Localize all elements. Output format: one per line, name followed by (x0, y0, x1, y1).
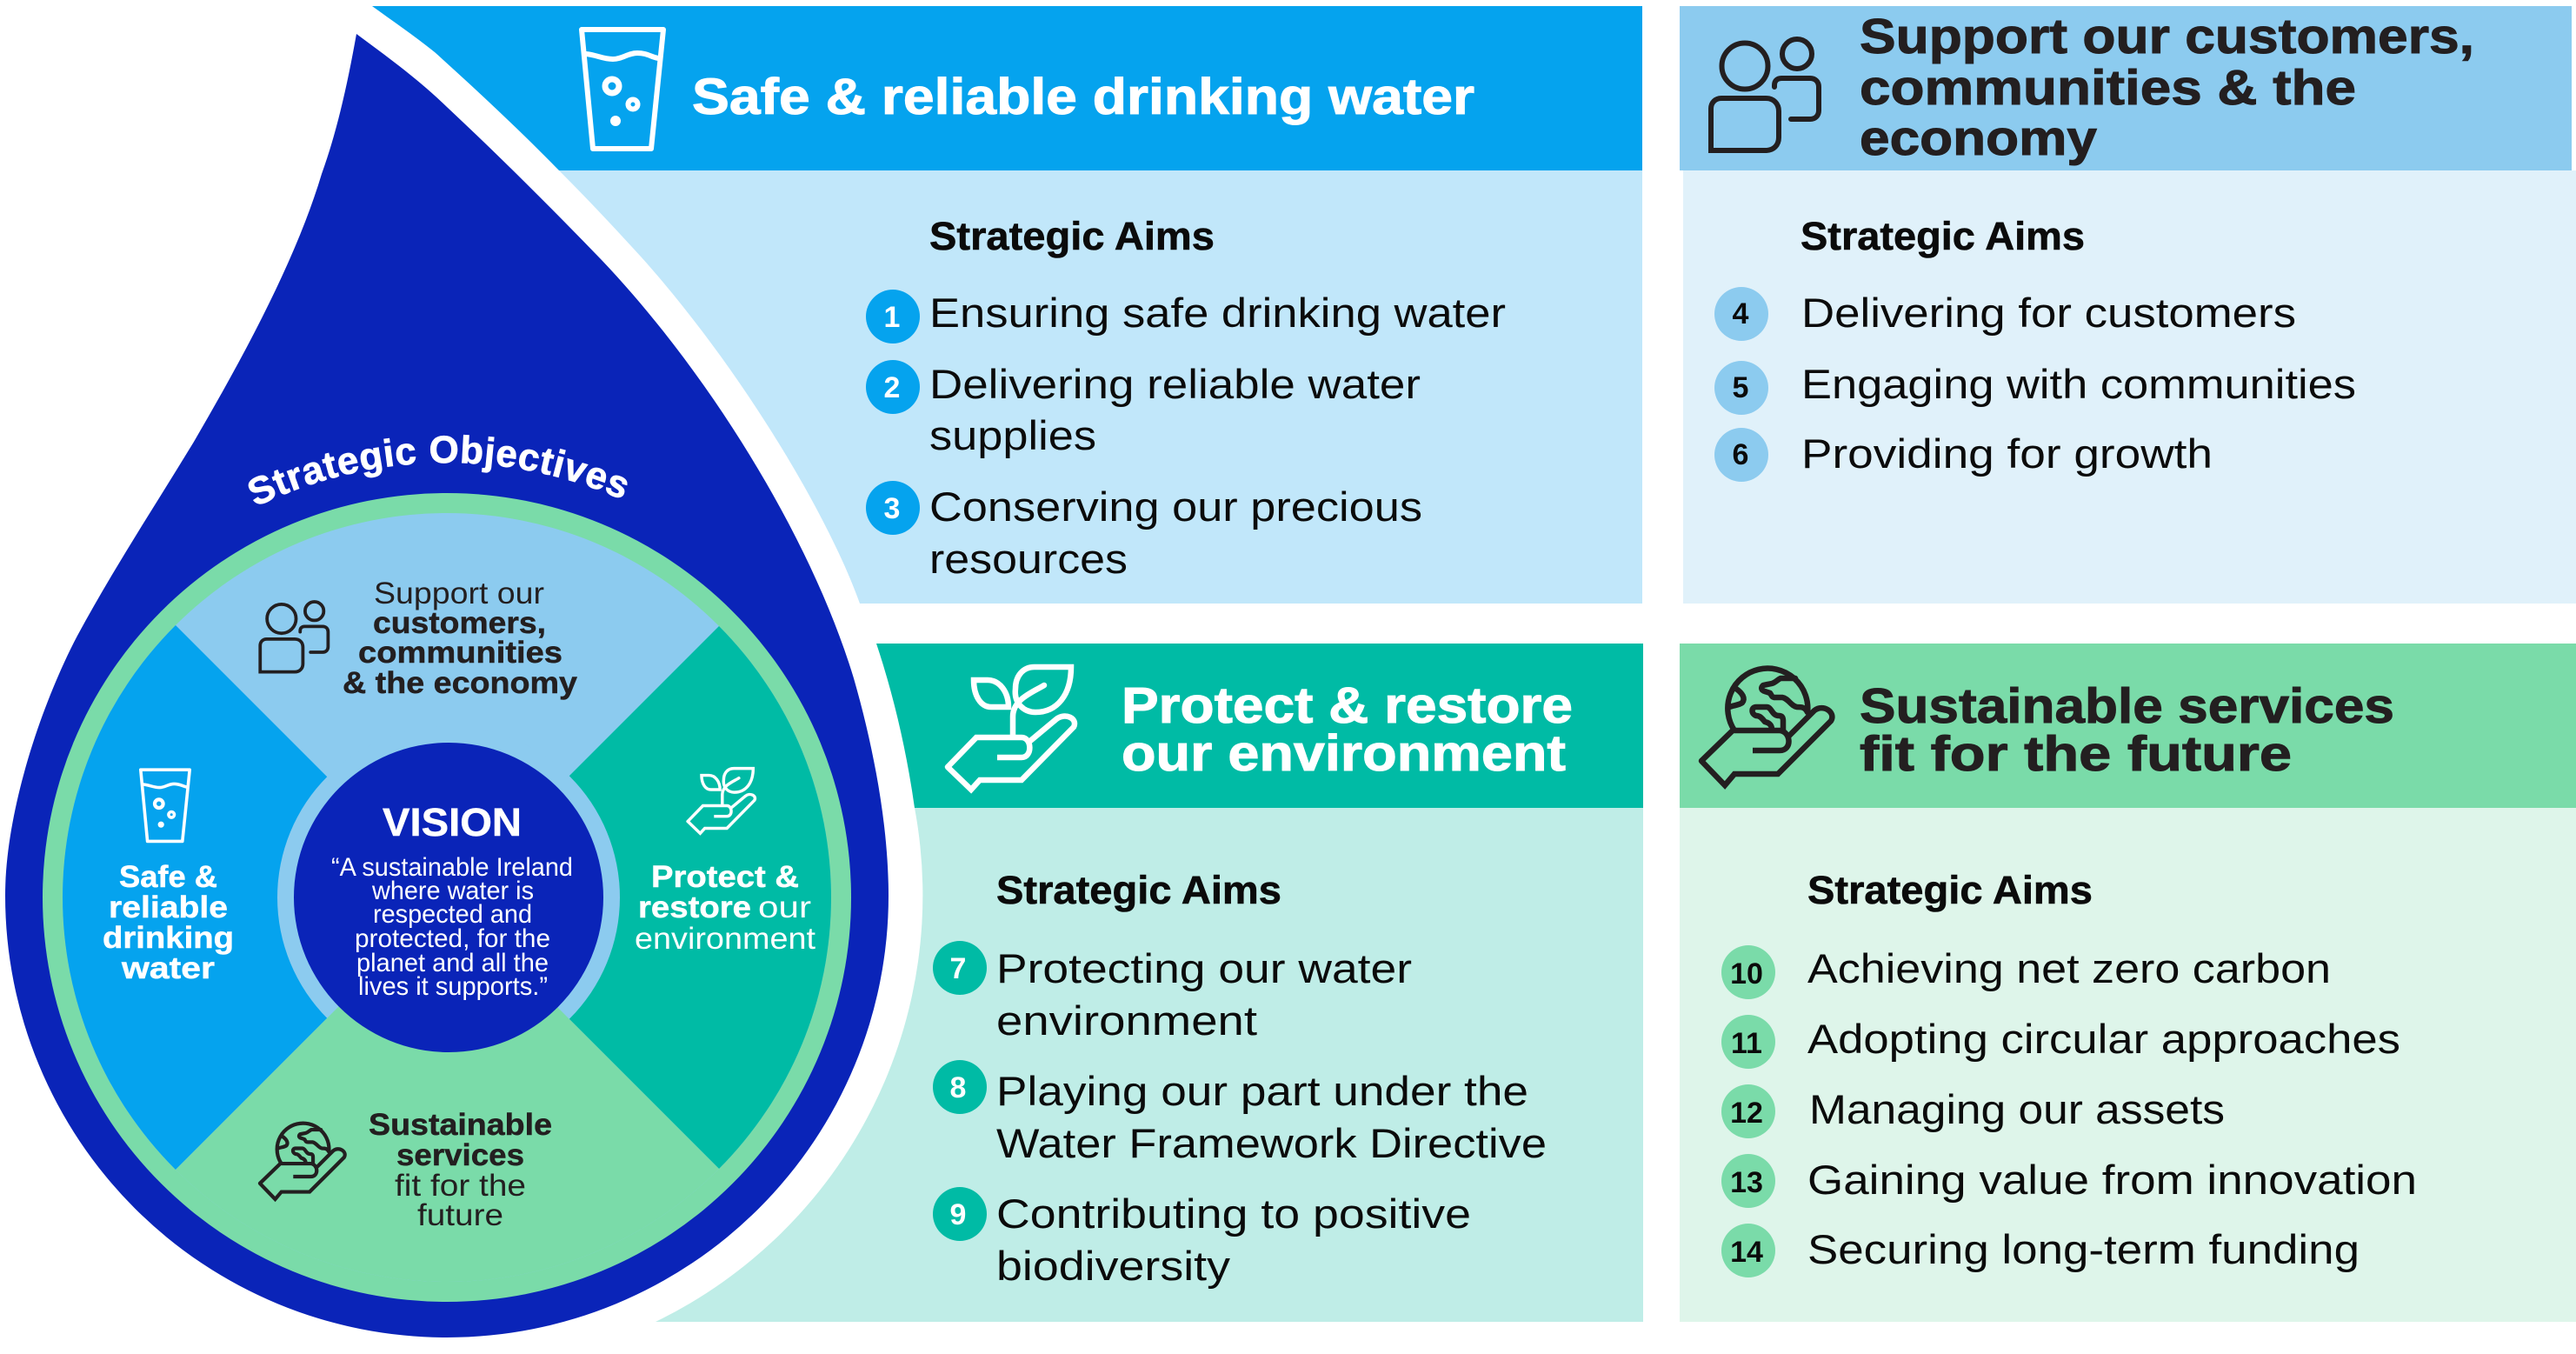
label: drinking water: water (121, 951, 215, 985)
label: environment (635, 860, 815, 956)
aim 4: Delivering for customers (1801, 290, 2296, 336)
panel body (1680, 808, 2576, 1322)
aim 8: 8 (950, 1071, 966, 1104)
outer ring (43, 493, 851, 1302)
heading: communities & the (1860, 60, 2356, 116)
aim 12: Managing our assets (1809, 1086, 2225, 1132)
heading: fit for the future (1860, 726, 2292, 782)
label: environment: our (758, 890, 811, 924)
vision quote: protected, for the (355, 924, 550, 953)
aim 9: 9 (950, 1198, 966, 1231)
aim 7: Protecting our water (996, 945, 1412, 991)
curved title: strategic objectives: Strategic Objectives (249, 435, 628, 504)
heading (1860, 9, 2474, 166)
label: customers: Support our (374, 577, 544, 610)
aim 6: Providing for growth (1801, 430, 2213, 477)
aim 5: Engaging with communities (1801, 361, 2356, 407)
heading: Sustainable services (1860, 678, 2394, 734)
vision quote: lives it supports.” (358, 972, 548, 1001)
sector: customers (63, 513, 831, 1282)
aim 14: Securing long-term funding (1807, 1226, 2360, 1272)
aim 4: 4 (1733, 297, 1749, 330)
panel body (656, 808, 1643, 1322)
aim 8: Water Framework Directive (996, 1120, 1547, 1166)
vision quote: “A sustainable Ireland (331, 853, 573, 882)
vision quote (331, 853, 573, 1001)
vision ring (277, 726, 620, 1069)
label: drinking water (103, 860, 234, 985)
panel header band (1680, 644, 2576, 808)
panel header band (876, 644, 1643, 808)
icon: glass of water (582, 30, 663, 149)
aim 11: Adopting circular approaches (1807, 1016, 2400, 1062)
panel: safe and reliable drinking water (372, 6, 1642, 604)
aim 11 (1721, 1015, 2400, 1069)
panel: sustainable services fit for the future (1680, 644, 2576, 1322)
label: customers: communities (358, 636, 562, 670)
label: environment: restore (638, 890, 751, 924)
icon: plant small (688, 769, 755, 833)
aim 7: environment (996, 997, 1257, 1044)
aim 6: 6 (1733, 438, 1748, 471)
icon: globe small (260, 1124, 345, 1199)
icon: plant in hand (948, 667, 1075, 790)
aim 9 (933, 1187, 1471, 1289)
water drop with strategic objectives (5, 34, 889, 1337)
aim 1 (866, 290, 1506, 344)
aim 2 (866, 360, 1421, 458)
aim 6 (1714, 428, 2213, 482)
aim 7: 7 (950, 952, 966, 985)
vision quote: planet and all the (356, 949, 549, 977)
panel body (559, 170, 1642, 604)
icon: people small (260, 602, 328, 672)
subheading: Strategic Aims (1801, 214, 2085, 258)
label: environment: environment (635, 922, 815, 956)
label: sustainable services: services (396, 1138, 524, 1172)
heading: Support our customers, (1860, 9, 2474, 64)
aim 9: Contributing to positive (996, 1191, 1471, 1237)
aim 2: supplies (929, 412, 1096, 458)
vision circle (294, 743, 603, 1052)
aim 12: 12 (1730, 1097, 1763, 1130)
label: customers: customers, (373, 606, 546, 640)
panel header band (372, 6, 1642, 170)
drop shape (5, 34, 889, 1337)
aim 7 (933, 941, 1412, 1044)
aim 12 (1721, 1084, 2225, 1138)
sector: sustainable services (176, 1007, 719, 1282)
vision quote: where water is (371, 877, 534, 905)
aim 5: 5 (1733, 371, 1748, 404)
aim 11: 11 (1731, 1027, 1762, 1060)
aim 3: resources (929, 536, 1128, 582)
heading (1860, 678, 2394, 782)
panel body (1683, 170, 2576, 604)
label: environment: Protect & (651, 860, 799, 894)
subheading: Strategic Aims (929, 214, 1215, 258)
heading: economy (1860, 110, 2097, 166)
label: sustainable services: fit for the (395, 1169, 526, 1203)
aim 2: 2 (884, 371, 900, 404)
aim 5 (1714, 361, 2356, 415)
objectives wheel (43, 493, 851, 1302)
aim 10: 10 (1730, 957, 1763, 990)
panel: protect and restore our environment (656, 644, 1643, 1322)
subheading: Strategic Aims (1807, 868, 2093, 912)
aim 3: Conserving our precious (929, 484, 1422, 530)
label: sustainable services (369, 1108, 552, 1232)
aim 3: 3 (884, 492, 900, 525)
aim 13 (1721, 1154, 2417, 1208)
panel header band (1680, 6, 2572, 170)
panel: support our customers, communities and the economy (1680, 6, 2576, 604)
aim 14: 14 (1730, 1236, 1763, 1269)
heading: Protect & restore (1122, 677, 1573, 734)
sector: environment (569, 626, 831, 1169)
sector: drinking water (63, 625, 327, 1170)
aim 13: 13 (1730, 1166, 1763, 1199)
subheading: Strategic Aims (996, 868, 1281, 912)
label: drinking water: Safe & (119, 860, 217, 894)
label: drinking water: reliable (109, 890, 228, 924)
label: sustainable services: Sustainable (369, 1108, 552, 1142)
aim 4 (1714, 287, 2296, 341)
label: customers: & the economy (343, 666, 578, 700)
aim 10 (1721, 945, 2331, 999)
vision quote: respected and (373, 900, 532, 929)
icon: glass small (141, 770, 190, 841)
aim 13: Gaining value from innovation (1807, 1157, 2417, 1203)
icon: globe in hand (1701, 669, 1832, 785)
label: drinking water: drinking (103, 921, 234, 955)
aim 10: Achieving net zero carbon (1807, 945, 2331, 991)
heading: our environment (1122, 725, 1566, 782)
heading: Safe & reliable drinking water (692, 69, 1474, 125)
label: customers (343, 577, 578, 700)
vision heading: VISION (383, 800, 522, 844)
aim 1: 1 (884, 301, 900, 334)
label: sustainable services: future (417, 1198, 503, 1232)
aim 1: Ensuring safe drinking water (929, 290, 1506, 336)
aim 8 (933, 1060, 1547, 1166)
aim 9: biodiversity (996, 1243, 1231, 1289)
aim 2: Delivering reliable water (929, 361, 1421, 407)
aim 14 (1721, 1224, 2360, 1277)
heading (1122, 677, 1573, 782)
aim 8: Playing our part under the (996, 1068, 1528, 1114)
icon: people (1711, 39, 1819, 150)
aim 3 (866, 481, 1422, 582)
